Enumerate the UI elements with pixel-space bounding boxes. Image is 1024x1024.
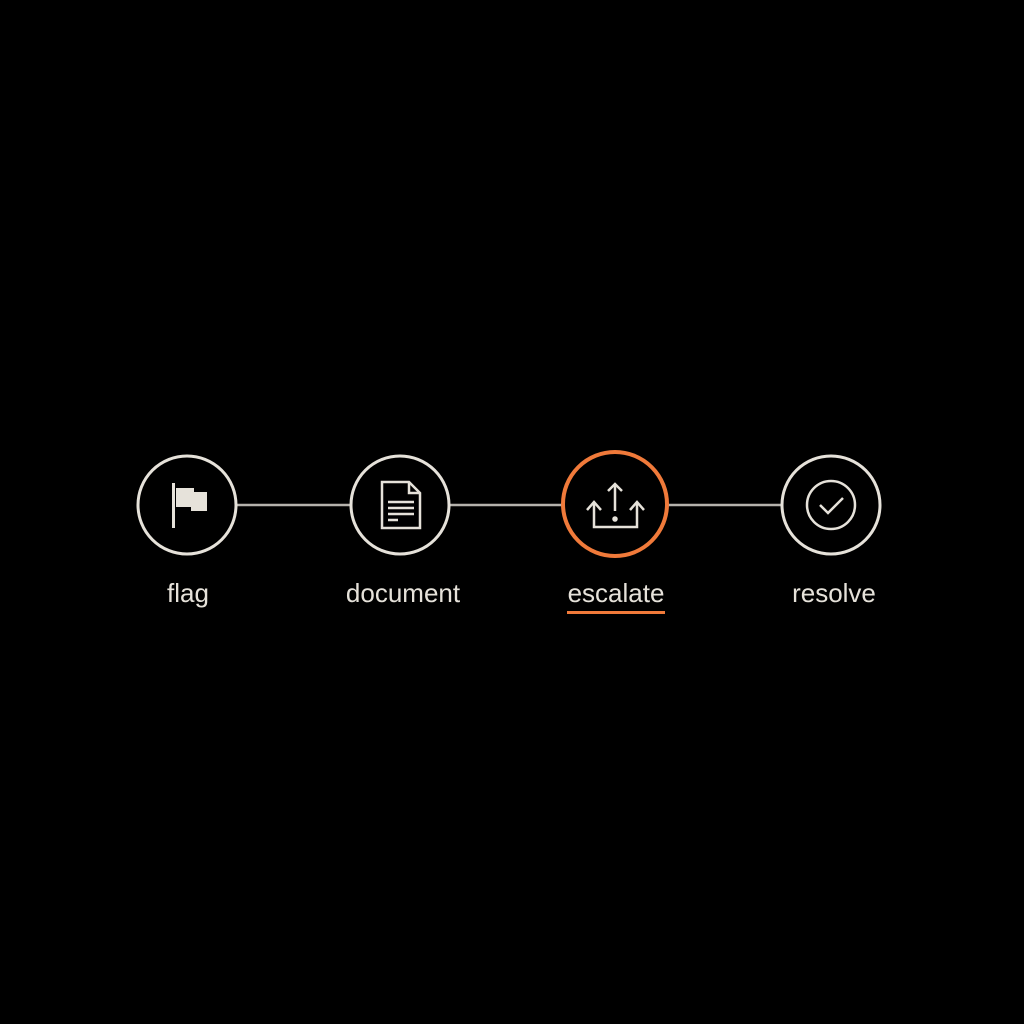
active underline bbox=[567, 611, 665, 614]
step: document bbox=[351, 456, 449, 554]
label: document: document bbox=[346, 578, 460, 608]
label: resolve: resolve bbox=[792, 578, 876, 608]
step: resolve bbox=[782, 456, 880, 554]
step: flag bbox=[138, 456, 236, 554]
step: escalate (active) bbox=[563, 452, 667, 556]
icon: check circle bbox=[807, 481, 855, 529]
icon: flag bbox=[172, 483, 207, 528]
icon: escalate arrows bbox=[587, 484, 644, 527]
label: flag: flag bbox=[167, 578, 209, 608]
connector lines bbox=[236, 504, 782, 506]
icon: document bbox=[382, 482, 420, 528]
label: escalate: escalate bbox=[568, 578, 664, 608]
